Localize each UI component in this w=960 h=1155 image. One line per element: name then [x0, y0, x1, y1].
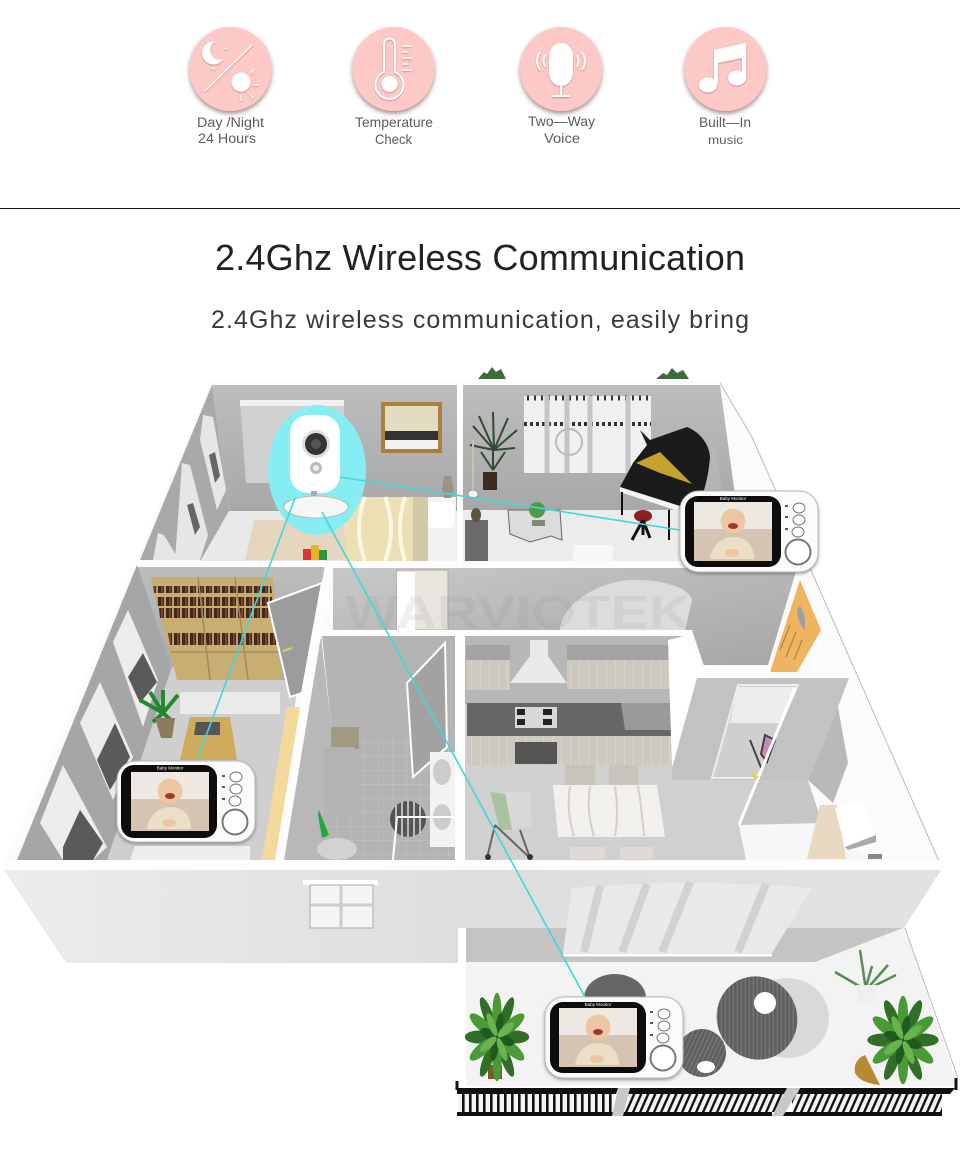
- rug: [245, 520, 350, 560]
- bookshelf: [150, 577, 282, 680]
- subtitle: 2.4Ghz wireless communication, easily bring: [211, 306, 749, 334]
- watermark: WARVIOTEK: [345, 586, 690, 638]
- caption: day and night: Day /Night: [197, 114, 264, 130]
- house white base: [2, 381, 942, 868]
- counter: [467, 703, 677, 736]
- wall between bedroom and living room: [457, 381, 463, 561]
- door handle: [751, 770, 758, 778]
- sink: [621, 703, 673, 730]
- room: right entry: [668, 636, 882, 860]
- room: study: [17, 565, 325, 860]
- range hood: [510, 640, 567, 683]
- caption: day and night: 24 Hours: [198, 130, 256, 146]
- stool: [632, 510, 652, 540]
- caption: built-in music: [699, 114, 751, 147]
- caption: built-in music: Built—In: [699, 114, 751, 130]
- door handle: [283, 648, 292, 651]
- caption: two-way voice: Two—Way: [528, 113, 595, 129]
- room: bedroom: [2, 381, 958, 1116]
- monitor top right: [680, 491, 818, 572]
- icon: thermometer: [352, 27, 434, 111]
- basins: [433, 759, 451, 785]
- monitor left: [117, 761, 255, 842]
- striped rug: [390, 801, 426, 837]
- pouf flower: [703, 963, 829, 1073]
- railing: [457, 1078, 956, 1116]
- sensor: [310, 462, 322, 474]
- upper cabinets: [466, 645, 510, 660]
- balcony post: [457, 928, 466, 1086]
- potted plant: [140, 690, 178, 738]
- facade window balcony: [563, 882, 812, 955]
- lower cabinets: [467, 736, 676, 765]
- green towel: [318, 810, 329, 838]
- wall top front: [2, 860, 942, 870]
- camera on cyan bubble: [268, 405, 366, 535]
- door: [268, 583, 322, 697]
- vase: [442, 476, 454, 498]
- sink counter: [430, 752, 456, 847]
- wall between bathroom and kitchen: [455, 632, 465, 860]
- wireless link lines: [197, 477, 680, 997]
- floor plan illustration: [2, 367, 958, 1116]
- oven: [515, 742, 557, 764]
- desk: [180, 717, 237, 760]
- pouf small: [584, 974, 646, 1022]
- stroller in doorway: [750, 735, 775, 770]
- title: 2.4Ghz Wireless Communication: [215, 237, 745, 278]
- balcony: [457, 928, 958, 1116]
- plant left: [465, 993, 529, 1081]
- bathroom door: [407, 643, 447, 777]
- caption: two-way voice: [528, 113, 595, 146]
- dining table: [553, 785, 665, 837]
- plant right: [855, 996, 939, 1085]
- room: bathroom: [284, 636, 456, 860]
- lens: [302, 430, 330, 458]
- orange door: [770, 580, 821, 672]
- stove: [515, 707, 557, 728]
- caption: day and night: [197, 114, 264, 146]
- room: living room: [463, 510, 757, 561]
- left wall windows: [153, 415, 226, 560]
- grand piano: [620, 422, 722, 540]
- icon: day and night: [190, 27, 272, 111]
- camera body: [290, 415, 340, 493]
- divider rule: [0, 208, 960, 209]
- floor lamp: [472, 440, 474, 492]
- wood strip: [262, 707, 300, 860]
- sunlit patches: [180, 692, 280, 714]
- vase on sideboard: [471, 508, 481, 522]
- laundry basket and washer: [331, 727, 359, 749]
- chest: [807, 803, 882, 859]
- wall above kitchen and bathroom: [318, 630, 772, 678]
- shower frame: [393, 817, 456, 860]
- house facade: [4, 870, 941, 963]
- chairs: [565, 765, 595, 785]
- ottoman: [573, 545, 613, 561]
- left wall windows: [40, 610, 158, 860]
- glass table and plant: [508, 502, 562, 542]
- caption: temperature: Temperature: [355, 114, 433, 130]
- monitor bottom: [545, 997, 683, 1078]
- wall between study and bathroom: [275, 565, 333, 860]
- facade window left: [303, 880, 378, 928]
- monitor bottom: Baby Monitor: [585, 1002, 612, 1007]
- corridor: [333, 568, 821, 672]
- monitor top right: Baby Monitor: [720, 496, 747, 501]
- rooftop plants: [478, 367, 689, 379]
- painting: [381, 402, 442, 453]
- floor light patch: [130, 846, 250, 860]
- french doors: [524, 396, 651, 473]
- toys: [303, 545, 327, 560]
- corridor door: [397, 570, 448, 630]
- room: kitchen: [465, 636, 757, 860]
- open door: [739, 688, 795, 825]
- pale plant: [835, 950, 896, 1003]
- high chair: [485, 792, 533, 860]
- corridor door glass: [397, 572, 415, 630]
- curved counter: [560, 580, 692, 631]
- palm plant: [470, 412, 517, 470]
- caption: temperature: [355, 114, 433, 147]
- lamp base: [468, 490, 478, 498]
- laptop on desk: [194, 722, 220, 735]
- feature icons row: [190, 27, 766, 147]
- sideboard: [465, 520, 488, 561]
- swirl cushion: [678, 1029, 726, 1077]
- plant pot: [483, 472, 497, 490]
- monitor left: Baby Monitor: [157, 766, 184, 770]
- icon: music note: [684, 27, 766, 111]
- caption: two-way voice: Voice: [544, 130, 580, 146]
- doorway: [712, 685, 798, 778]
- stand: [311, 491, 317, 500]
- wardrobe: [240, 400, 344, 483]
- bed: [345, 497, 456, 561]
- caption: built-in music: music: [708, 133, 743, 147]
- caption: temperature: Check: [375, 131, 413, 147]
- icon: microphone: [520, 27, 602, 111]
- horizontal wall: [133, 561, 810, 568]
- pillows: [428, 502, 454, 528]
- toilet: [317, 838, 357, 860]
